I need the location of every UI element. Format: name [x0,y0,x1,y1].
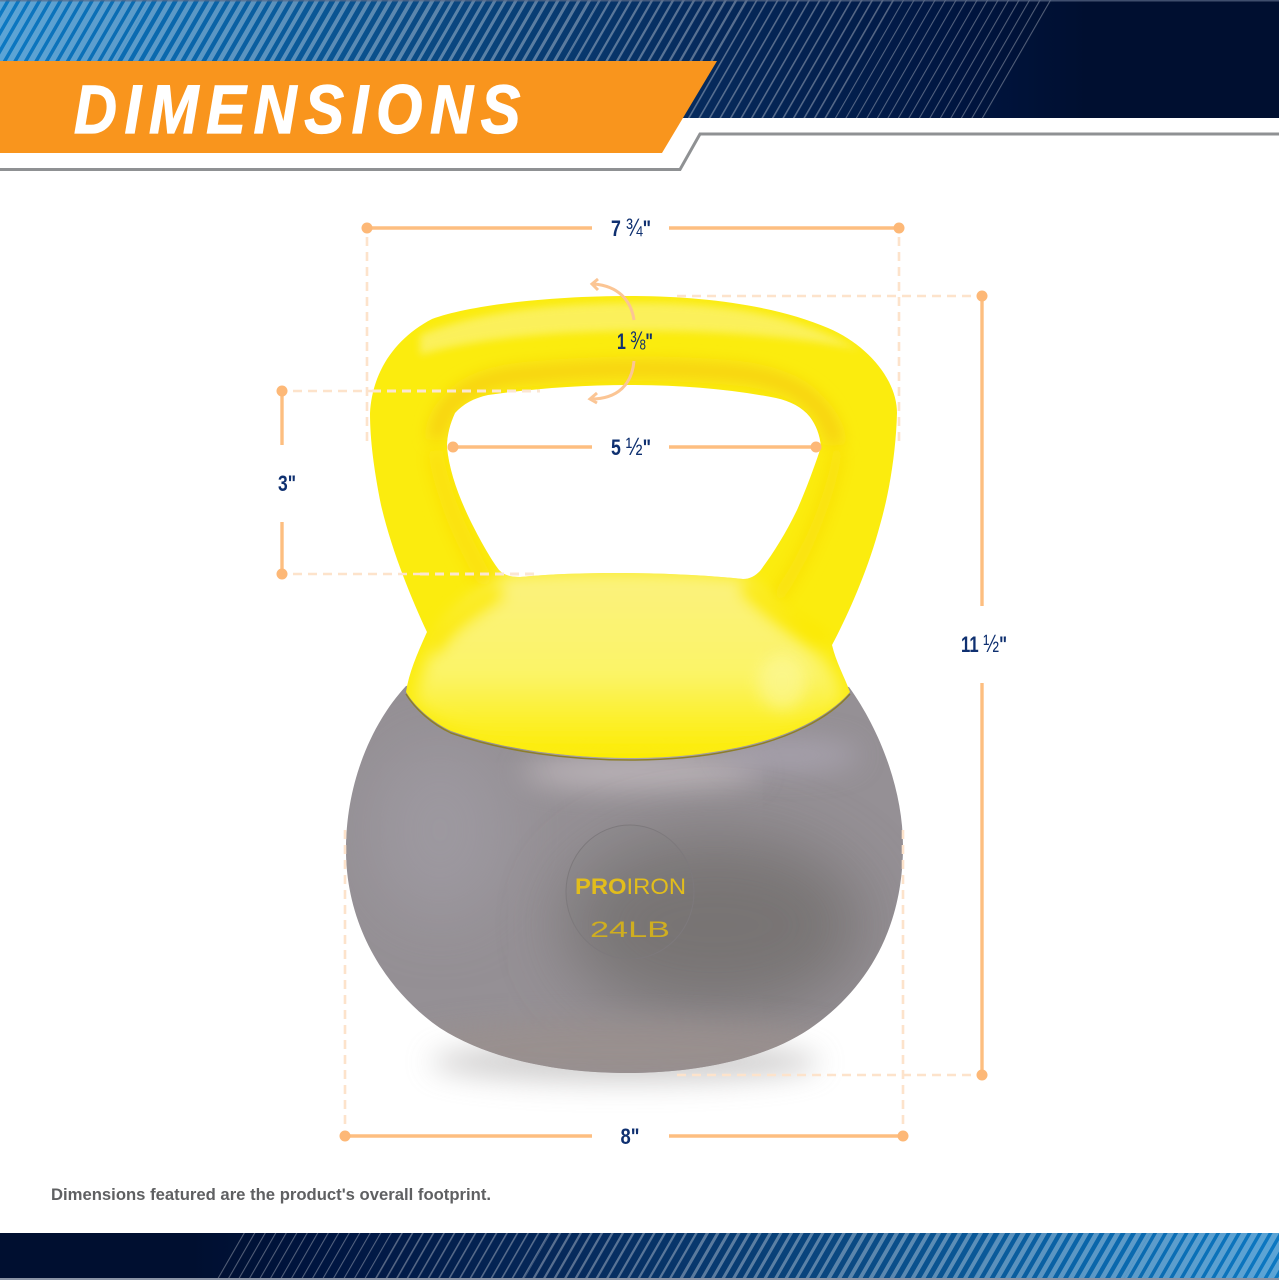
cap top [415,572,842,758]
ball rim shadow [406,694,850,760]
footer banner [0,1233,1279,1280]
cap highlight [758,654,806,710]
logo badge [566,825,694,959]
dimension: handle opening 5 1/2: 5 ½" [611,433,651,461]
dimension: width 7 3/4 [362,214,904,242]
handle top highlight [420,303,860,355]
header outline stroke [0,134,1279,170]
dimension: handle height 3: 3" [278,471,296,496]
cap shoulder shading [432,585,825,650]
handle inner shading [436,369,836,445]
dimension: width 7 3/4: 7 ¾" [611,214,651,242]
header banner [0,0,1279,118]
dimension: handle height 3 [276,386,296,580]
brand logo: PROIRON [575,874,686,899]
kettlebell [330,285,920,1090]
dimension: handle thickness 1 3/8: 1 ⅜" [617,327,653,355]
guide lines [293,237,975,1128]
floor shadow [430,1042,820,1082]
dimension: base width 8: 8" [620,1124,640,1149]
footnote: Dimensions featured are the product's overall footprint. [51,1185,491,1204]
dimension: total height 11 1/2: 11 ½" [961,630,1007,658]
dimension: base width 8 [340,1124,908,1149]
dimension: handle thickness 1 3/8 [590,279,653,403]
weight label: 24LB [590,917,670,942]
left arm shading [435,450,488,585]
title: DIMENSIONS [74,71,520,148]
title banner [0,61,717,153]
dimension: total height 11 1/2 [961,290,1007,1080]
yellow handle and cap [360,285,910,765]
ball body [346,686,903,1073]
dimension: handle opening 5 1/2 [448,433,822,461]
right arm shading [775,450,838,600]
